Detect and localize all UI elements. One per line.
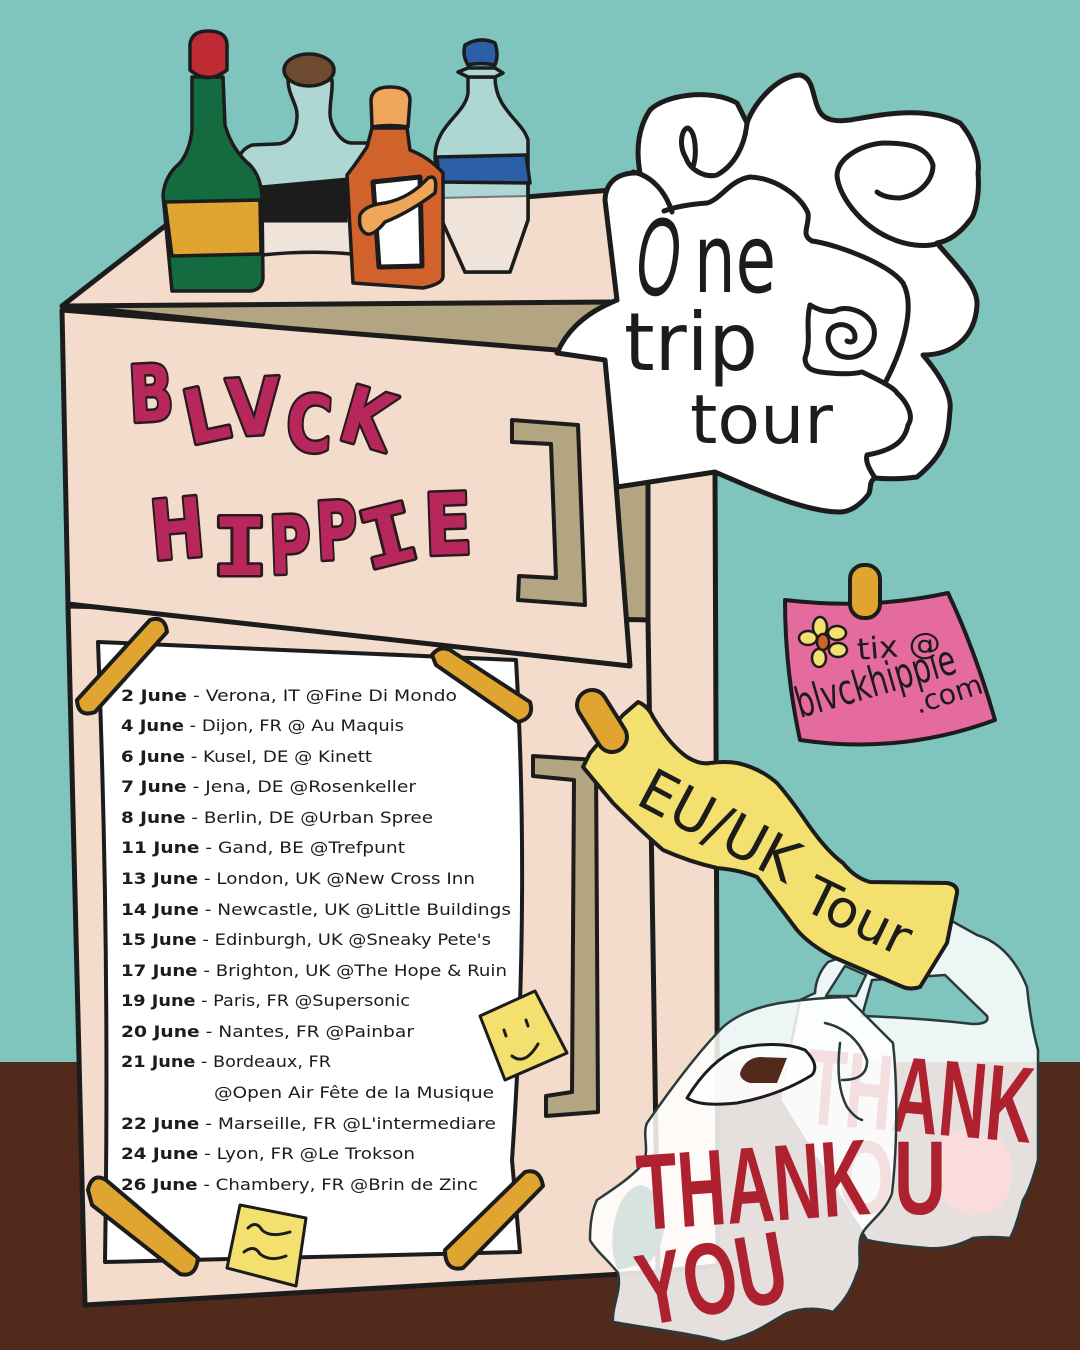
back bag bbox=[780, 920, 1039, 1248]
green bottle bbox=[163, 31, 263, 291]
cloud title: ne bbox=[694, 205, 776, 315]
date row: 14 June - Newcastle, UK @Little Buildings bbox=[121, 900, 511, 919]
lower handle bbox=[533, 756, 598, 1116]
fridge lower body bbox=[68, 606, 658, 1305]
date row: 8 June - Berlin, DE @Urban Spree bbox=[121, 808, 433, 827]
date row: 6 June - Kusel, DE @ Kinett bbox=[121, 747, 372, 766]
HIPPIE: E bbox=[422, 475, 474, 576]
fridge top bbox=[62, 190, 640, 320]
tour dates list bbox=[121, 686, 511, 1194]
back bag: OU bbox=[838, 1120, 946, 1237]
tour dates poster bbox=[98, 642, 522, 1262]
date row: @Open Air Fête de la Musique bbox=[214, 1083, 494, 1102]
sticky note squiggle bbox=[227, 1205, 306, 1286]
BLVCK: L bbox=[175, 367, 237, 463]
banner text: Tour bbox=[793, 865, 922, 969]
tape bottom right bbox=[445, 1171, 543, 1269]
front bag bbox=[590, 997, 896, 1348]
plastic bags bbox=[590, 920, 1039, 1348]
HIPPIE: I bbox=[212, 501, 268, 594]
date row: 21 June - Bordeaux, FR bbox=[121, 1052, 331, 1071]
date row: 7 June - Jena, DE @Rosenkeller bbox=[121, 777, 416, 796]
BLVCK: C bbox=[284, 379, 335, 471]
BLVCK bbox=[126, 349, 406, 471]
date row: 4 June - Dijon, FR @ Au Maquis bbox=[121, 716, 404, 735]
yellow tour banner bbox=[583, 702, 957, 988]
front bag: YOU bbox=[628, 1209, 796, 1348]
cloud title bbox=[624, 192, 833, 460]
tape top left bbox=[77, 619, 167, 714]
banner text bbox=[627, 755, 922, 969]
cloud title: O bbox=[629, 192, 689, 322]
date row: 17 June - Brighton, UK @The Hope & Ruin bbox=[121, 961, 507, 980]
front bag: THANK bbox=[633, 1116, 873, 1253]
HIPPIE: I bbox=[350, 485, 427, 588]
band name bbox=[126, 349, 474, 594]
date row: 24 June - Lyon, FR @Le Trokson bbox=[121, 1144, 415, 1163]
cloud title: trip bbox=[624, 296, 758, 389]
tape top right bbox=[432, 648, 531, 722]
fridge side bbox=[620, 300, 718, 1272]
cloud title: tour bbox=[690, 381, 833, 460]
pink ticket note bbox=[785, 565, 995, 744]
date row: 11 June - Gand, BE @Trefpunt bbox=[121, 838, 405, 857]
ticket pin bbox=[850, 565, 880, 618]
clear bottle bbox=[435, 40, 530, 272]
HIPPIE: H bbox=[146, 481, 209, 580]
HIPPIE bbox=[146, 475, 474, 594]
decanter bottle bbox=[240, 54, 370, 255]
date row: 13 June - London, UK @New Cross Inn bbox=[121, 869, 475, 888]
flower icon bbox=[799, 617, 847, 667]
cloud: one trip tour bbox=[557, 75, 978, 512]
sticky note smiley bbox=[480, 991, 567, 1080]
date row: 2 June - Verona, IT @Fine Di Mondo bbox=[121, 686, 457, 705]
tape bottom left bbox=[88, 1178, 198, 1275]
orange bottle bbox=[347, 87, 443, 288]
date row: 20 June - Nantes, FR @Painbar bbox=[121, 1022, 414, 1041]
date row: 19 June - Paris, FR @Supersonic bbox=[121, 991, 410, 1010]
ticket text: tix @ bbox=[856, 626, 942, 668]
ticket text: .com bbox=[910, 668, 987, 721]
upper handle bbox=[512, 420, 585, 605]
poster tape bbox=[77, 619, 543, 1275]
date row: 22 June - Marseille, FR @L'intermediare bbox=[121, 1114, 496, 1133]
fridge bbox=[62, 190, 718, 1305]
floor bbox=[0, 1062, 1080, 1350]
banner pin bbox=[592, 705, 612, 737]
date row: 15 June - Edinburgh, UK @Sneaky Pete's bbox=[121, 930, 491, 949]
date row: 26 June - Chambery, FR @Brin de Zinc bbox=[121, 1175, 478, 1194]
bag hole bbox=[687, 1044, 815, 1104]
cloud shape bbox=[557, 75, 978, 512]
fridge interior bbox=[66, 302, 648, 620]
BLVCK: V bbox=[224, 362, 283, 455]
cloud inner lines bbox=[633, 123, 940, 478]
banner text: EU/UK bbox=[627, 755, 813, 897]
bottles bbox=[163, 31, 530, 291]
BLVCK: K bbox=[331, 370, 406, 471]
BLVCK: B bbox=[126, 349, 176, 441]
HIPPIE: P bbox=[267, 499, 313, 593]
upper door bbox=[62, 310, 630, 666]
HIPPIE: P bbox=[313, 484, 360, 579]
ticket text: blvckhippie bbox=[789, 635, 961, 728]
